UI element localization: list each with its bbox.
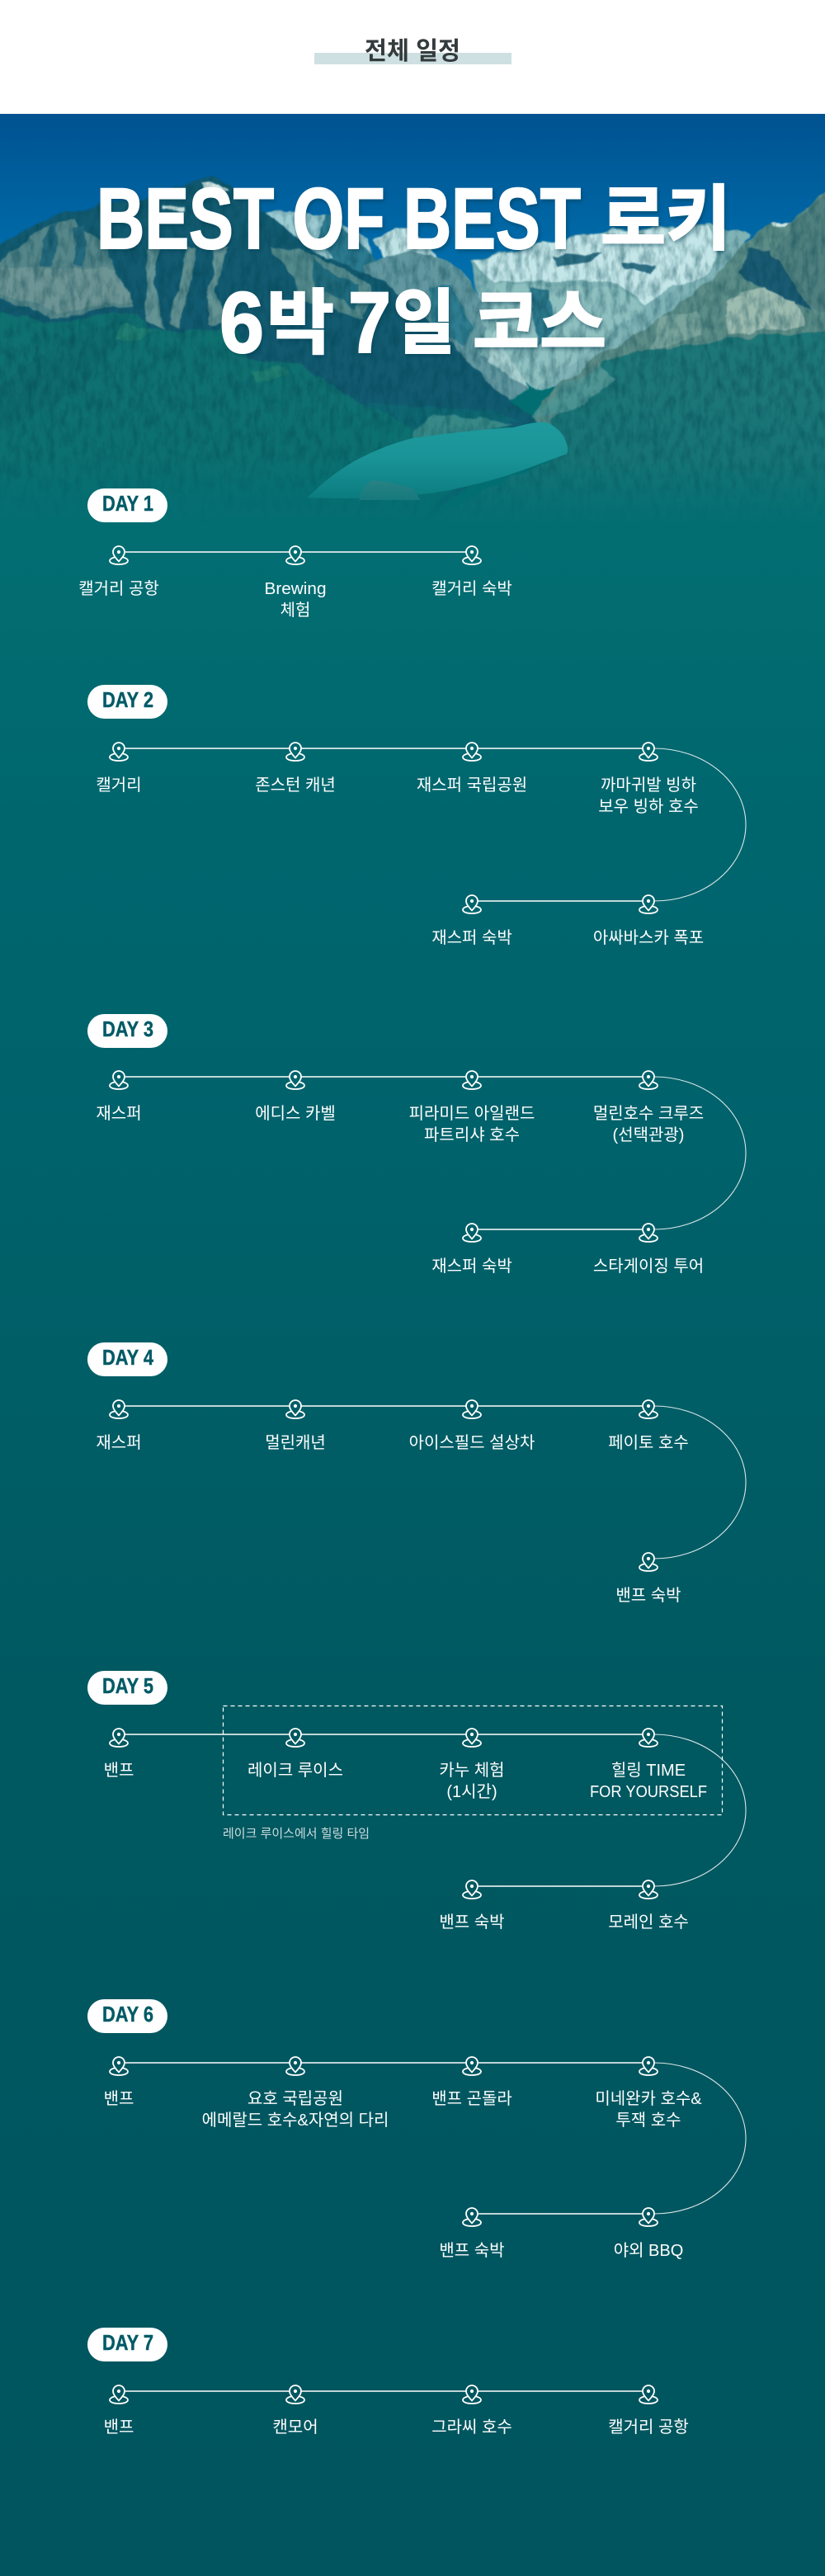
stop: 캔모어: 캔모어 — [272, 2418, 318, 2437]
stop: 야외 BBQ — [614, 2208, 683, 2260]
day badge — [87, 1014, 167, 1048]
fade to teal — [0, 388, 825, 545]
back wall — [470, 224, 751, 388]
day badge — [87, 2328, 167, 2361]
stop: 밴프 곤돌라 — [431, 2057, 512, 2108]
route line — [125, 1734, 746, 1886]
forested lower slopes — [0, 309, 512, 528]
stop: 모레인 호수 — [608, 1880, 689, 1932]
stop: 밴프: 밴프 — [104, 2089, 134, 2108]
snow dome — [374, 227, 441, 268]
stop: 재스퍼 — [96, 1400, 142, 1452]
title: 일 — [393, 284, 455, 363]
route line — [125, 2063, 746, 2214]
header band — [0, 0, 825, 114]
stop: 캘거리 숙박 — [431, 546, 512, 598]
panel: day 5 — [87, 1671, 746, 1932]
back snow ridge — [264, 211, 375, 272]
hero photo: mountain lake — [0, 114, 825, 545]
day badge — [87, 1342, 167, 1376]
stop: 밴프: 밴프 — [104, 1761, 134, 1780]
stop: 캔모어 — [272, 2385, 318, 2437]
title: BEST OF BEST — [97, 171, 581, 267]
stop: 피라미드 아일랜드: 파트리샤 호수 — [424, 1125, 520, 1144]
stop: 미네완카 호수: 미네완카 호수& — [595, 2089, 702, 2108]
left mountain — [0, 176, 544, 528]
stop: 레이크 루이스: 레이크 루이스 — [248, 1761, 343, 1780]
stop: 밴프 숙박: 밴프 숙박 — [439, 1913, 505, 1932]
heading underline bar — [314, 53, 512, 64]
stop: 멀린호수 크루즈 — [593, 1071, 704, 1144]
stop: 재스퍼 숙박: 재스퍼 숙박 — [431, 1257, 512, 1276]
stop: Brewing 체험: 체험 — [280, 601, 310, 620]
day badge: DAY 6 — [102, 2002, 153, 2026]
stop: 캘거리 공항: 캘거리 공항 — [608, 2418, 689, 2437]
stop: 캘거리 공항 — [608, 2385, 689, 2437]
stop: 아이스필드 설상차 — [409, 1400, 535, 1452]
stop: 캘거리 — [96, 743, 142, 795]
title: 로키 — [601, 180, 731, 259]
day badge — [87, 1671, 167, 1705]
stop: 밴프 곤돌라: 밴프 곤돌라 — [431, 2089, 512, 2108]
stop: 에디스 카벨: 에디스 카벨 — [255, 1104, 336, 1123]
route line — [125, 748, 746, 901]
stop: 아싸바스카 폭포 — [593, 895, 704, 947]
heading: 전체 일정 — [365, 38, 460, 65]
title: 코스 — [473, 284, 606, 363]
main snow — [472, 226, 719, 305]
lake — [308, 422, 568, 498]
title: 7 — [348, 275, 391, 371]
stop: 캘거리 숙박: 캘거리 숙박 — [431, 579, 512, 598]
stop: 그라씨 호수 — [431, 2385, 512, 2437]
panel: day 4 — [87, 1342, 746, 1605]
stop: 스타게이징 투어: 스타게이징 투어 — [593, 1257, 704, 1276]
stop: 밴프 — [104, 2057, 134, 2108]
stop: 페이토 호수: 페이토 호수 — [608, 1433, 689, 1452]
stop: 에디스 카벨 — [255, 1071, 336, 1123]
panel: day 3 — [87, 1014, 746, 1276]
stop: 재스퍼 국립공원 — [417, 743, 527, 795]
stop: 미네완카 호수: 투잭 호수 — [615, 2111, 681, 2130]
stop: 캘거리 공항: 캘거리 공항 — [78, 579, 159, 598]
stop: 멀린호수 크루즈: 멀린호수 크루즈 — [593, 1104, 704, 1123]
stop: Brewing 체험 — [264, 546, 327, 620]
stop: 재스퍼 숙박: 재스퍼 숙박 — [431, 928, 512, 947]
title — [97, 171, 731, 371]
stop: 밴프 — [104, 1729, 134, 1780]
stop: 재스퍼: 재스퍼 — [96, 1433, 142, 1452]
stop: 밴프 숙박: 밴프 숙박 — [615, 1586, 681, 1605]
stop: 재스퍼: 재스퍼 — [96, 1104, 142, 1123]
note: 레이크 루이스에서 힐링 타임 — [223, 1827, 370, 1841]
stop: 밴프: 밴프 — [104, 2418, 134, 2437]
stop: 카누 체험: 카누 체험 — [439, 1761, 505, 1780]
stop: 밴프 숙박: 밴프 숙박 — [439, 2241, 505, 2260]
stop: 까마귀발 빙하: 까마귀발 빙하 — [601, 776, 696, 795]
stop: 캘거리 공항 — [78, 546, 159, 598]
stop: 카누 체험: (1시간) — [446, 1782, 497, 1801]
day badge — [87, 685, 167, 719]
stop: 미네완카 호수 — [595, 2057, 702, 2130]
dashed highlight box — [223, 1706, 723, 1815]
right forest — [412, 330, 825, 528]
stop: 레이크 루이스 — [248, 1729, 343, 1780]
route line — [125, 1077, 746, 1229]
chateau — [359, 480, 421, 500]
stop: 요호 국립공원 — [202, 2057, 389, 2130]
route line — [125, 1406, 746, 1559]
stop: Brewing 체험: Brewing — [264, 580, 327, 598]
right mountain — [528, 186, 825, 429]
stop: 야외 BBQ: 야외 BBQ — [614, 2241, 683, 2260]
stop: 그라씨 호수: 그라씨 호수 — [431, 2418, 512, 2437]
route line — [125, 551, 466, 553]
stop: 페이토 호수 — [608, 1400, 689, 1452]
stop: 아싸바스카 폭포: 아싸바스카 폭포 — [593, 928, 704, 947]
stop: 힐링 TIME: 힐링 TIME — [611, 1761, 686, 1780]
mid mountain rock — [363, 252, 528, 413]
day badge: DAY 4 — [102, 1345, 153, 1370]
day badge: DAY 1 — [102, 491, 153, 516]
stop: 피라미드 아일랜드 — [409, 1071, 535, 1144]
stop: 힐링 TIME: FOR YOURSELF — [590, 1783, 707, 1801]
stop: 재스퍼 — [96, 1071, 142, 1123]
day badge — [87, 1999, 167, 2033]
stop: 밴프 숙박 — [439, 1880, 505, 1932]
stop: 존스턴 캐년 — [255, 743, 336, 795]
stop: 재스퍼 숙박 — [431, 895, 512, 947]
stop: 재스퍼 국립공원: 재스퍼 국립공원 — [417, 776, 527, 795]
day badge: DAY 3 — [102, 1017, 153, 1041]
stop: 멀린호수 크루즈: (선택관광) — [613, 1125, 684, 1144]
stop: 모레인 호수: 모레인 호수 — [608, 1913, 689, 1932]
stop: 멀린캐년: 멀린캐년 — [265, 1433, 326, 1452]
title: 박 — [266, 284, 334, 363]
panel: day 2 — [87, 685, 746, 947]
stop: 존스턴 캐년: 존스턴 캐년 — [255, 776, 336, 795]
day badge — [87, 488, 167, 522]
stop: 밴프 숙박 — [615, 1553, 681, 1605]
panel: day 7 — [87, 2328, 689, 2437]
stop: 멀린캐년 — [265, 1400, 326, 1452]
day badge: DAY 2 — [102, 687, 153, 712]
stop: 밴프 숙박 — [439, 2208, 505, 2260]
stop: 재스퍼 숙박 — [431, 1224, 512, 1276]
stop: 아이스필드 설상차: 아이스필드 설상차 — [409, 1433, 535, 1452]
day badge: DAY 5 — [102, 1673, 153, 1698]
stop: 까마귀발 빙하: 보우 빙하 호수 — [598, 797, 699, 816]
stop: 요호 국립공원: 에메랄드 호수&자연의 다리 — [202, 2111, 389, 2130]
title: 6 — [219, 275, 264, 371]
panel: day 1 — [78, 488, 512, 620]
stop: 카누 체험 — [439, 1729, 505, 1801]
stop: 밴프 — [104, 2385, 134, 2437]
stop: 캘거리: 캘거리 — [96, 776, 142, 795]
stop: 피라미드 아일랜드: 피라미드 아일랜드 — [409, 1104, 535, 1123]
stop: 힐링 TIME — [590, 1729, 707, 1801]
day badge: DAY 7 — [102, 2330, 153, 2355]
stop: 요호 국립공원: 요호 국립공원 — [248, 2089, 343, 2108]
stop: 스타게이징 투어 — [593, 1224, 704, 1276]
panel: day 6 — [87, 1999, 746, 2260]
stop: 까마귀발 빙하 — [598, 743, 699, 816]
route line — [125, 2390, 643, 2392]
